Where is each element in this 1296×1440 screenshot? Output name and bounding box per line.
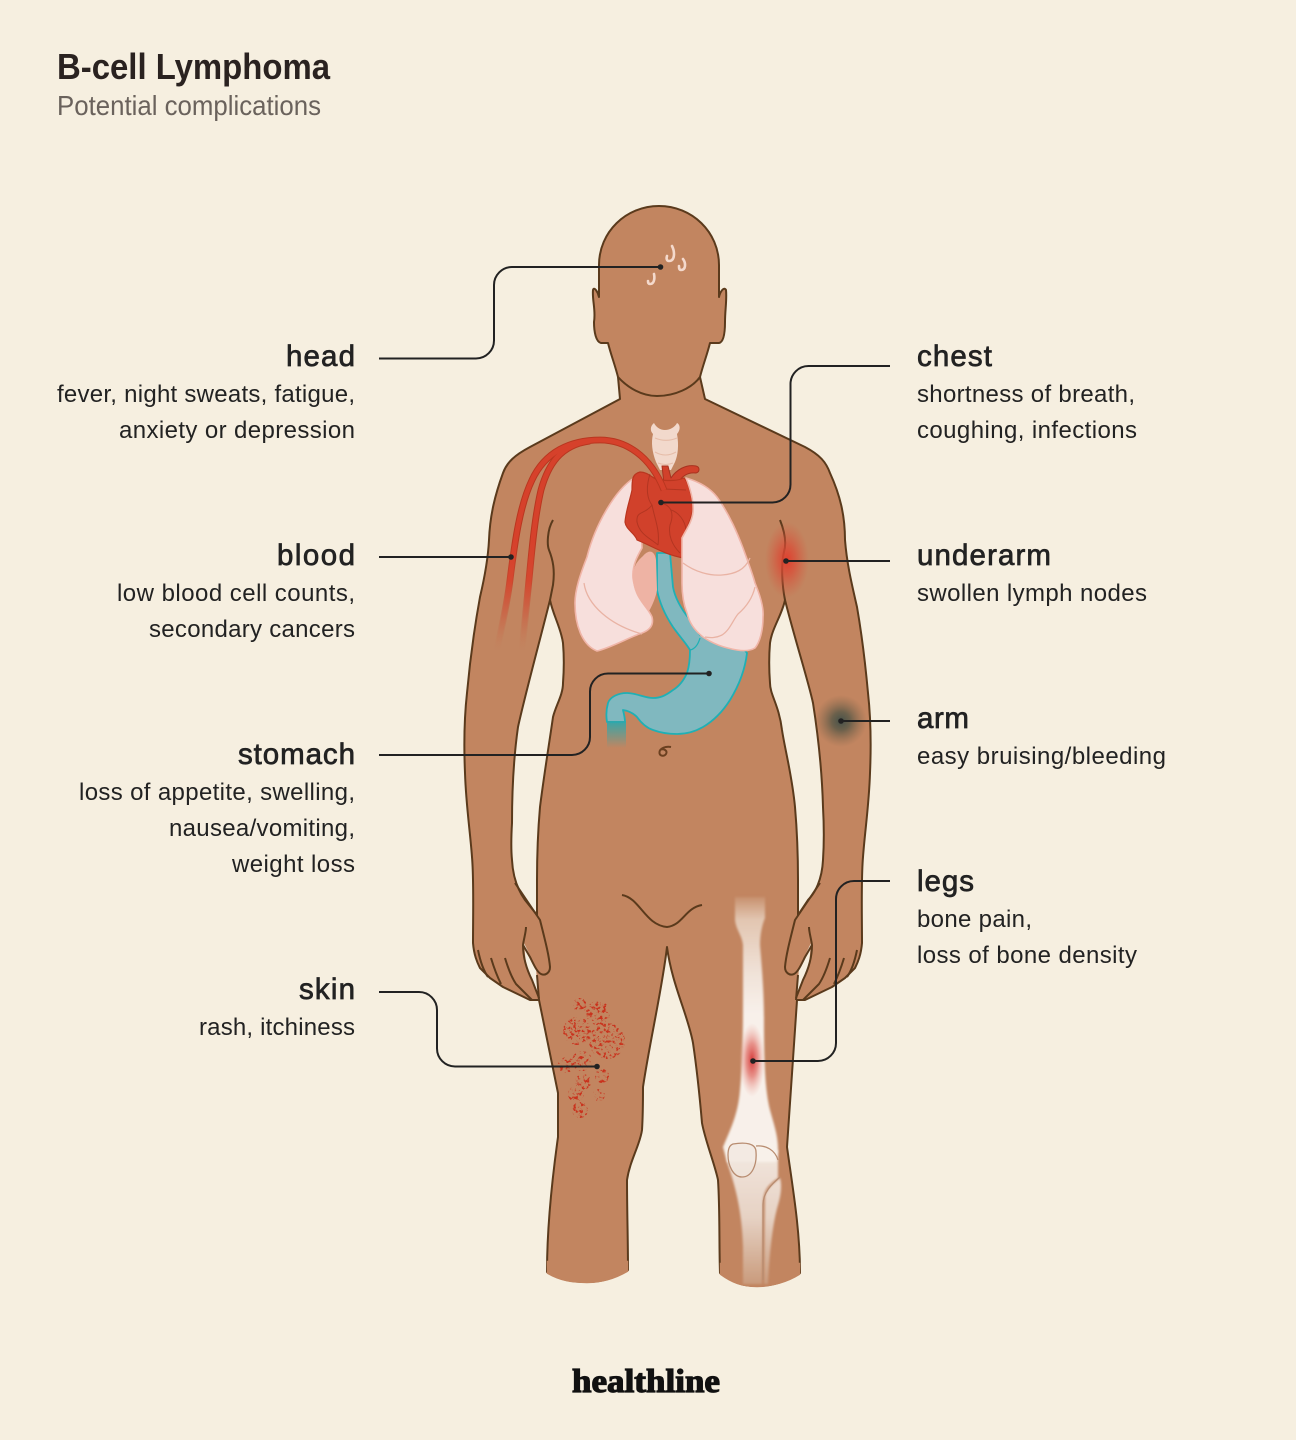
femur: [723, 897, 778, 1162]
text block: arm: easy bruising/bleeding: [917, 743, 1166, 770]
leader: chest: [661, 366, 890, 502]
body figure: [464, 206, 871, 1286]
veins in upper arm: [497, 440, 664, 650]
subtitle: Potential complications: [57, 90, 321, 121]
text block: skin: [199, 973, 355, 1041]
text block: legs: loss of bone density: [917, 942, 1137, 969]
text block: head: [57, 340, 355, 444]
text block: blood: [117, 539, 355, 643]
underarm swelling glow: [765, 522, 809, 598]
tibia: [727, 1150, 778, 1284]
icon: sweat drops: [648, 246, 685, 284]
text block: skin: skin: [299, 973, 355, 1006]
text block: head: head: [286, 340, 355, 373]
vessels on top of the heart: [662, 466, 699, 493]
gap between left arm and torso: [511, 600, 564, 915]
leader: skin: [379, 992, 597, 1066]
text block: arm: arm: [917, 702, 969, 735]
left hand: [478, 883, 550, 1000]
text block: underarm: [917, 539, 1147, 607]
text block: stomach: loss of appetite, swelling,: [79, 779, 355, 806]
text block: underarm: swollen lymph nodes: [917, 580, 1147, 607]
head: [593, 206, 726, 396]
text block: head: fever, night sweats, fatigue,: [57, 381, 355, 408]
text block: legs: bone pain,: [917, 906, 1032, 933]
arm bruise: [815, 695, 867, 747]
leader end dots: [508, 264, 844, 1069]
body silhouette: [464, 377, 871, 1286]
text block: blood: low blood cell counts,: [117, 580, 355, 607]
fibula: [764, 1178, 781, 1284]
leader lines: [379, 267, 890, 1066]
text block: skin: rash, itchiness: [199, 1014, 355, 1041]
navel: [659, 747, 671, 756]
skin rash: [558, 998, 625, 1118]
gap between right arm and torso: [769, 600, 824, 915]
text block: chest: shortness of breath,: [917, 381, 1135, 408]
title: B-cell Lymphoma: [57, 46, 331, 87]
text block: head: anxiety or depression: [119, 417, 355, 444]
leader: blood: [379, 556, 511, 558]
stomach and esophagus: [606, 553, 747, 749]
logo: healthline: healthline: [572, 1364, 720, 1400]
text block: legs: [917, 865, 1137, 969]
groin line: [622, 895, 702, 927]
text block: stomach: stomach: [238, 738, 355, 771]
leader: head: [379, 267, 660, 358]
pylorus fade: [607, 721, 626, 749]
leg hem cover: [548, 1262, 799, 1286]
leader: stomach: [379, 674, 709, 755]
text block: blood: blood: [277, 539, 355, 572]
text block: chest: coughing, infections: [917, 417, 1137, 444]
left lung: [575, 478, 657, 651]
text block: legs: legs: [917, 865, 974, 898]
trachea: [651, 423, 680, 470]
bone pain glow: [739, 1023, 765, 1097]
leader: legs: [753, 881, 890, 1061]
right lung: [682, 478, 763, 651]
text block: chest: [917, 340, 1137, 444]
leader: underarm: [786, 560, 890, 562]
text block: arm: [917, 702, 1166, 770]
leg bones: [723, 897, 781, 1284]
text block: blood: secondary cancers: [149, 616, 355, 643]
heart: [625, 466, 699, 558]
heart body: [625, 472, 693, 558]
heart vessels and grooves: [637, 474, 686, 553]
armpit creases: [548, 520, 785, 600]
esophagus junction detail: [690, 638, 700, 650]
text block: underarm: underarm: [917, 539, 1051, 572]
leader: arm: [841, 720, 890, 722]
text block: stomach: weight loss: [231, 851, 355, 878]
text block: chest: chest: [917, 340, 992, 373]
text block: stomach: nausea/vomiting,: [169, 815, 355, 842]
text block: stomach: [79, 738, 355, 878]
knee outlines: [728, 1143, 756, 1177]
right hand: [785, 883, 857, 1000]
